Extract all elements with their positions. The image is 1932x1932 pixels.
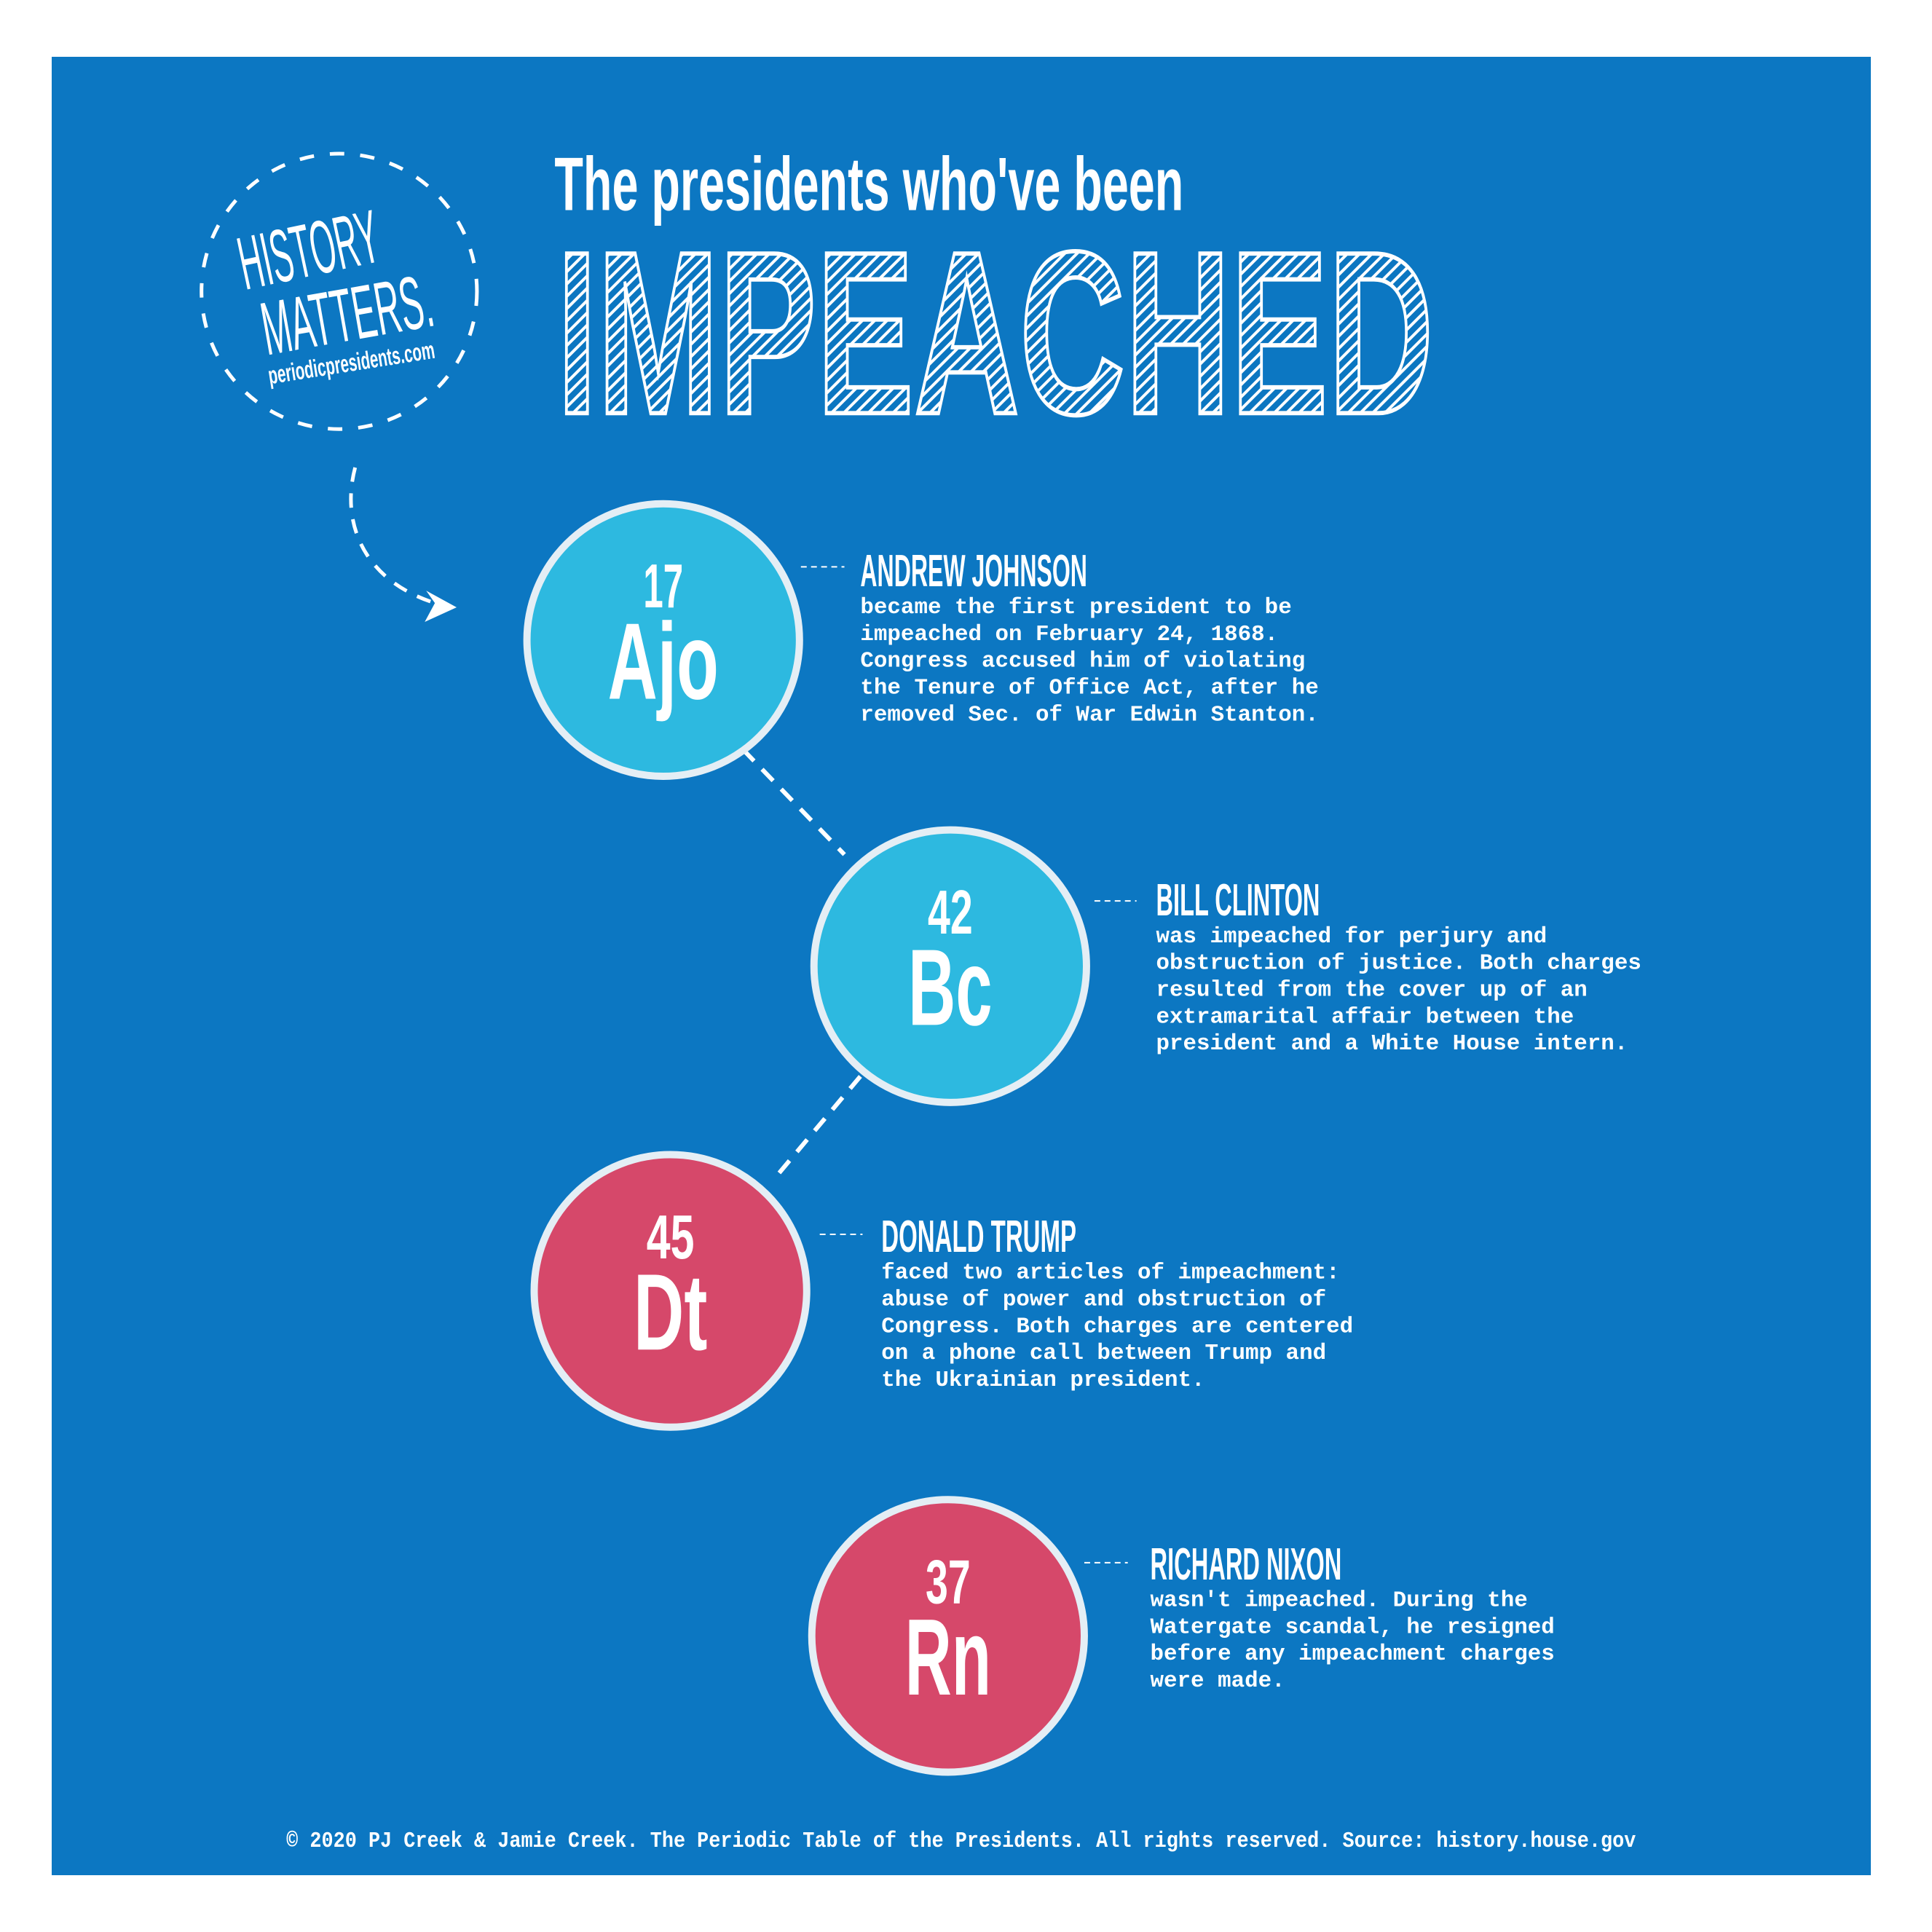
element: Donald Trump	[535, 1155, 807, 1427]
element: Bill Clinton	[814, 830, 1087, 1103]
text: Donald Trump: Congress. Both charges are centered	[881, 1314, 1353, 1339]
text: Donald Trump: faced two articles of impeachment:	[881, 1261, 1340, 1286]
text: Bill Clinton	[1095, 875, 1641, 1057]
text: Andrew Johnson: removed Sec. of War Edwin Stanton.	[860, 702, 1319, 728]
text: Donald Trump: DONALD TRUMP	[881, 1212, 1076, 1262]
logo: history matters: HISTORY	[231, 194, 387, 306]
text: Andrew Johnson: became the first president to be	[860, 595, 1292, 620]
element: Richard Nixon: 37	[926, 1548, 971, 1617]
text: Donald Trump: abuse of power and obstruction of	[881, 1288, 1326, 1313]
title: impeached: IMPEACHED	[556, 204, 1434, 462]
text: Richard Nixon: were made.	[1151, 1668, 1285, 1694]
logo: history matters: MATTERS.	[255, 258, 439, 371]
title	[554, 142, 1434, 462]
text: Donald Trump: the Ukrainian president.	[881, 1368, 1205, 1393]
title: The presidents who've been	[554, 142, 1183, 226]
text: Andrew Johnson: Congress accused him of violating	[860, 649, 1305, 674]
text: Andrew Johnson	[801, 546, 1319, 728]
element: Andrew Johnson: 17	[643, 552, 683, 621]
text: Andrew Johnson: ANDREW JOHNSON	[860, 546, 1087, 596]
text: Richard Nixon	[1084, 1539, 1555, 1694]
text: Donald Trump: on a phone call between Trump and	[881, 1341, 1326, 1366]
element: Bill Clinton: Bc	[908, 926, 993, 1048]
text: Bill Clinton: extramarital affair between the	[1156, 1004, 1574, 1030]
connectors	[743, 749, 860, 1180]
logo: history matters: periodicpresidents.com	[267, 336, 437, 390]
element: Bill Clinton: 42	[928, 878, 973, 947]
text: Richard Nixon: RICHARD NIXON	[1151, 1539, 1341, 1590]
element: Richard Nixon	[812, 1499, 1084, 1773]
arrow: logo to first circle	[351, 468, 457, 622]
text: Bill Clinton: was impeached for perjury and	[1156, 924, 1547, 950]
element: Andrew Johnson	[527, 504, 800, 776]
element: Andrew Johnson: Ajo	[608, 600, 719, 722]
logo: history matters	[202, 154, 477, 429]
text: Bill Clinton: resulted from the cover up of an	[1156, 978, 1588, 1004]
text: Richard Nixon: Watergate scandal, he resigned	[1151, 1614, 1555, 1640]
text: Richard Nixon: wasn't impeached. During the	[1151, 1588, 1528, 1614]
text: Bill Clinton: president and a White House intern.	[1156, 1031, 1628, 1057]
text: Bill Clinton: BILL CLINTON	[1156, 875, 1320, 926]
text: Donald Trump	[820, 1212, 1353, 1393]
text: Bill Clinton: obstruction of justice. Both charges	[1156, 951, 1641, 977]
text: Andrew Johnson: the Tenure of Office Act, after he	[860, 676, 1319, 701]
element: Richard Nixon: Rn	[905, 1596, 991, 1718]
text: Richard Nixon: before any impeachment charges	[1151, 1641, 1555, 1667]
footer: © 2020 PJ Creek & Jamie Creek. The Periodic Table of the Presidents. All rights reserved. Source: history.house.gov	[286, 1829, 1636, 1854]
text: Andrew Johnson: impeached on February 24, 1868.	[860, 622, 1278, 647]
element: Donald Trump: 45	[647, 1203, 694, 1272]
element: Donald Trump: Dt	[634, 1251, 707, 1373]
